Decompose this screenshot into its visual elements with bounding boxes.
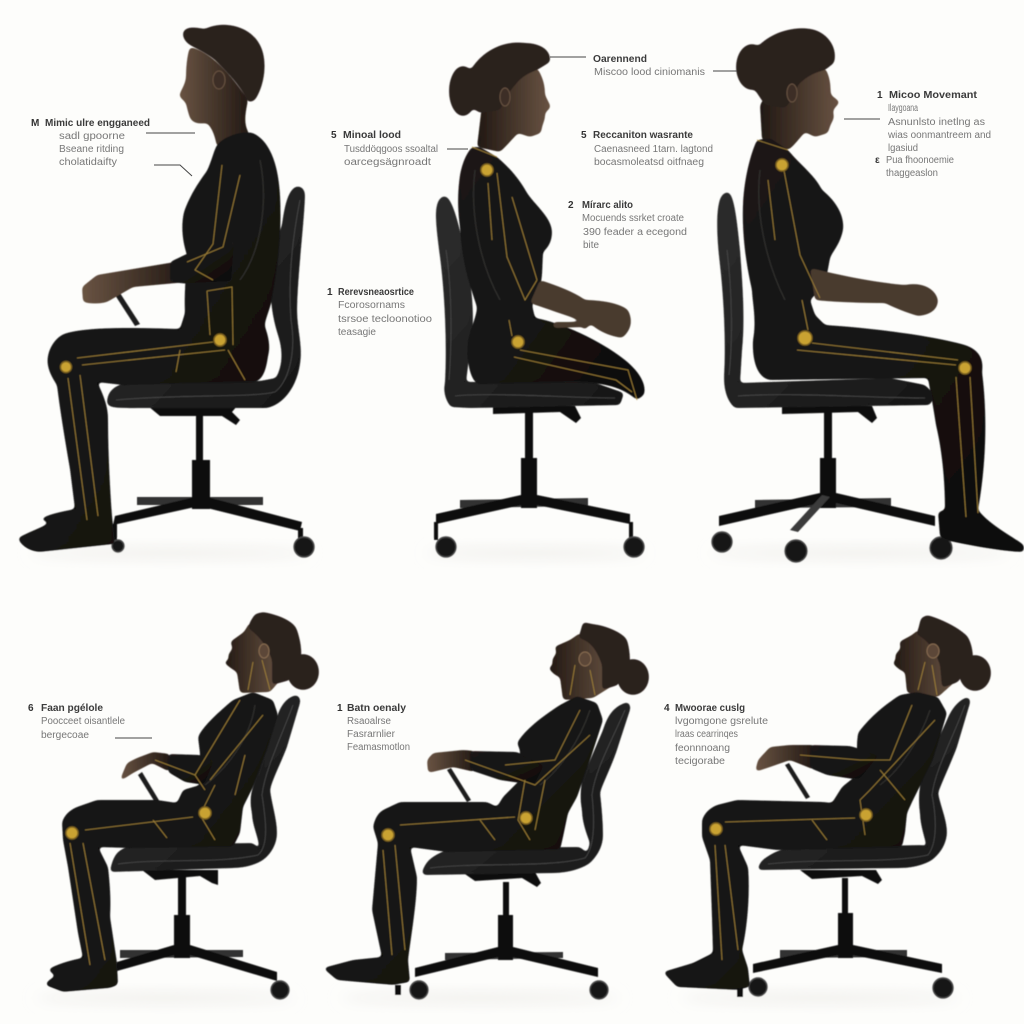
callout: lower left: Faan pgélole — [41, 703, 103, 714]
callout: micro movement — [844, 90, 991, 179]
callout: middle left: Rerevsneaosrtice — [338, 287, 414, 298]
sleeve — [810, 745, 880, 780]
callout: micro movement: wias oonmantreem and — [887, 130, 991, 141]
figure 3: upright seated woman facing right with leg forward — [710, 28, 1024, 562]
callout: micro movement: ε — [875, 155, 880, 166]
hair — [916, 615, 973, 688]
callout: middle left: teasagie — [338, 327, 376, 338]
arm support — [447, 768, 471, 802]
figure 6: reclined seated woman, lower right — [663, 615, 991, 1003]
face and neck — [179, 47, 250, 147]
ear — [787, 84, 797, 102]
forearm and hand — [530, 280, 631, 338]
chair base — [749, 870, 953, 998]
gold anatomy lines — [472, 147, 637, 400]
hair — [449, 42, 550, 116]
callout: recognition: 5 — [581, 130, 587, 141]
face and neck — [477, 68, 551, 152]
callout: top left: Bseane ritding — [59, 144, 124, 155]
body — [323, 696, 603, 985]
heel — [395, 985, 401, 995]
arm support — [785, 763, 810, 799]
chair seat and back — [758, 697, 970, 870]
callout: micro alto — [568, 200, 687, 251]
callout: micro movement: Micoo Movemant — [889, 90, 978, 101]
chair base — [112, 405, 314, 557]
arm support — [115, 293, 140, 326]
callout: lower centre: Rsaoalrse — [347, 716, 391, 727]
sleeve — [168, 754, 215, 785]
ear — [213, 71, 225, 89]
callout: top left: Mimic ulre engganeed — [45, 118, 150, 129]
callout: lower left: bergecoae — [41, 730, 89, 741]
callout: lower right: feonnnoang — [675, 743, 730, 754]
callout: lower right — [664, 703, 768, 767]
body — [18, 132, 281, 552]
body — [743, 138, 1024, 552]
ear — [500, 88, 510, 106]
chair seat and back — [436, 196, 624, 408]
callout: top left: sadl gpoorne — [59, 131, 125, 142]
figure 4: reclined seated woman, lower left — [35, 612, 319, 1003]
forearm and hand — [427, 750, 475, 773]
bun — [287, 654, 319, 690]
forearm and hand — [82, 260, 187, 304]
callout: lower centre: 1 — [337, 703, 343, 714]
chair base — [712, 405, 952, 562]
hair — [248, 612, 301, 685]
callout: middle left — [327, 287, 432, 338]
callout: lower right: lraas cearrinqes — [675, 729, 738, 740]
callout: top left: M — [31, 118, 39, 129]
callout: lower right: 4 — [664, 703, 670, 714]
callout: micro movement: Asnunlsto inetlng as — [888, 117, 985, 128]
callout: lower right: Mwoorae cuslg — [675, 703, 745, 714]
callout: lower left: Poocceet oisantlele — [41, 716, 125, 727]
callout: micro alto: 390 feader a ecegond — [583, 227, 687, 238]
callout: lower centre: Feamasmotlon — [347, 742, 410, 753]
ear — [579, 652, 591, 666]
body — [458, 147, 645, 400]
callout: recognition — [581, 130, 713, 168]
callout: micro alto: Mocuends ssrket croate — [582, 213, 684, 224]
callout: mineral load: Tusddöqgoos ssoaltal — [344, 144, 438, 155]
callout: top centre head — [550, 54, 737, 78]
callout: lower centre: Fasrarnlier — [347, 729, 396, 740]
arm support — [138, 772, 160, 804]
heel — [737, 988, 743, 997]
bun — [617, 659, 649, 695]
gold anatomy lines — [710, 662, 937, 960]
callout: micro movement: Ilaygoana — [888, 103, 918, 114]
callout: micro alto: 2 — [568, 200, 574, 211]
hair — [736, 28, 835, 108]
callout: lower right: tecigorabe — [675, 756, 725, 767]
callout: recognition: Reccaniton wasrante — [593, 130, 693, 141]
chair base — [434, 405, 644, 557]
bun — [959, 655, 991, 691]
callout: micro movement: 1 — [877, 90, 883, 101]
chair seat and back — [107, 186, 305, 408]
callout: middle left: tsrsoe tecloonotioo — [338, 314, 432, 325]
callout: micro alto: bite — [583, 240, 599, 251]
sleeve — [470, 751, 545, 785]
callout: micro movement: thaggeaslon — [886, 168, 938, 179]
forearm and hand — [810, 268, 938, 316]
body — [45, 692, 278, 992]
callout: mineral load: oarcegsägnroadt — [344, 157, 431, 168]
callout: mineral load — [331, 130, 468, 168]
callout: middle left: Fcorosornams — [338, 300, 405, 311]
callout: micro alto: Mírarc alito — [582, 200, 633, 211]
chair base — [117, 870, 289, 999]
callout: micro movement: lgasiud — [888, 143, 918, 154]
callout: lower centre: Batn oenaly — [347, 703, 406, 714]
gold anatomy lines — [66, 660, 270, 965]
face and neck — [223, 622, 283, 693]
face and neck — [548, 633, 617, 700]
callout: mineral load: 5 — [331, 130, 337, 141]
chair seat and back — [422, 702, 630, 875]
ear — [259, 644, 269, 658]
callout: top left — [31, 118, 195, 176]
chair seat and back — [717, 192, 935, 408]
gold anatomy lines — [382, 665, 595, 955]
hair — [578, 622, 630, 690]
callout: lower left: 6 — [28, 703, 34, 714]
callout: micro movement: Pua fhoonoemie — [886, 155, 954, 166]
forearm and hand — [119, 752, 170, 782]
face and neck — [760, 68, 840, 150]
ear — [927, 644, 939, 658]
chair seat and back — [110, 695, 300, 872]
chair base — [410, 872, 608, 999]
sleeve — [170, 240, 235, 284]
callout: top centre head: Miscoo lood ciniomanis — [594, 67, 705, 78]
forearm and hand — [755, 745, 815, 772]
face and neck — [892, 630, 957, 697]
body — [663, 692, 947, 990]
hair — [183, 25, 265, 102]
callout: top left: cholatidaifty — [59, 157, 117, 168]
figure 2: upright seated woman facing right — [425, 42, 645, 558]
callout: top centre head: Oarennend — [593, 54, 647, 65]
callout: recognition: Caenasneed 1tarn. lagtond — [594, 144, 713, 155]
callout: mineral load: Minoal lood — [343, 130, 401, 141]
gold anatomy lines — [757, 140, 978, 517]
gold anatomy lines — [60, 160, 263, 520]
callout: lower right: lvgomgone gsrelute — [675, 716, 768, 727]
callout: lower left — [28, 703, 152, 741]
callout: lower centre — [337, 703, 410, 753]
figure 1: upright seated woman facing left — [18, 25, 314, 558]
callout: recognition: bocasmoleatsd oitfnaeg — [594, 157, 704, 168]
callout: middle left: 1 — [327, 287, 333, 298]
figure 5: reclined seated woman, lower centre — [323, 622, 649, 1003]
